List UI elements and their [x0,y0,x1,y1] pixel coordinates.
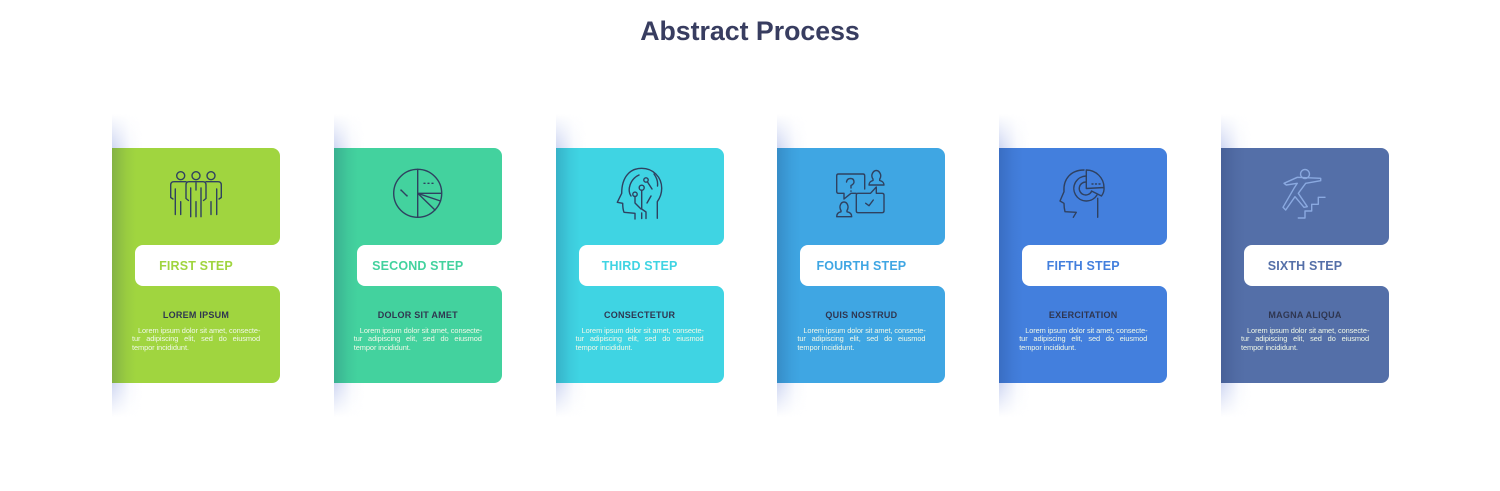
body text [354,326,482,352]
panel: sixth step [1221,120,1389,411]
body text: Lorem ipsum dolor sit amet, consecte- [360,326,482,334]
step label: FIRST STEP [159,259,233,273]
body text: tempor incididunt. [576,343,632,352]
body text: tur adipiscing elit, sed do eiusmod [132,334,260,343]
step label: FIFTH STEP [1047,259,1120,273]
body text: tur adipiscing elit, sed do eiusmod [354,334,482,343]
step label: THIRD STEP [602,259,678,273]
panel: second step [334,120,502,411]
panel: fourth step [777,120,945,411]
icon: pie chart [393,168,442,218]
body text [797,326,926,352]
panel: first step [112,120,280,411]
body text: Lorem ipsum dolor sit amet, consecte- [1025,326,1148,334]
subheading: DOLOR SIT AMET [378,310,458,320]
body text: tur adipiscing elit, sed do eiusmod [797,334,925,343]
body text: tur adipiscing elit, sed do eiusmod [1241,334,1369,343]
body text [1019,326,1148,352]
body text: tempor incididunt. [1019,343,1076,352]
icon: head with pie chart [1059,169,1105,218]
title: Abstract Process [640,16,860,46]
icon: people talking with speech bubbles [836,170,885,218]
body text: tur adipiscing elit, sed do eiusmod [1019,334,1147,343]
subheading: QUIS NOSTRUD [825,310,897,320]
icon: person running up stairs [1282,168,1326,219]
subheading: CONSECTETUR [604,310,675,320]
body text: Lorem ipsum dolor sit amet, consecte- [582,326,704,334]
body text [576,326,704,352]
body text: Lorem ipsum dolor sit amet, consecte- [1247,326,1369,334]
body text: tempor incididunt. [1241,343,1298,352]
panel: fifth step [999,120,1167,411]
subheading: EXERCITATION [1049,310,1118,320]
step label: FOURTH STEP [816,259,906,273]
panel: third step [556,120,724,411]
body text: tempor incididunt. [354,343,411,352]
subheading: MAGNA ALIQUA [1268,310,1342,320]
icon: head with circuit [616,168,662,220]
step label: SIXTH STEP [1268,259,1342,273]
step label: SECOND STEP [372,259,463,273]
body text: tempor incididunt. [797,343,854,352]
body text: Lorem ipsum dolor sit amet, consecte- [803,326,926,334]
icon: team of three people [170,171,222,218]
body text: tempor incididunt. [132,343,189,352]
body text: tur adipiscing elit, sed do eiusmod [576,334,704,343]
body text [1241,326,1370,352]
subheading: LOREM IPSUM [163,310,229,320]
body text [132,326,260,352]
body text: Lorem ipsum dolor sit amet, consecte- [138,326,260,334]
